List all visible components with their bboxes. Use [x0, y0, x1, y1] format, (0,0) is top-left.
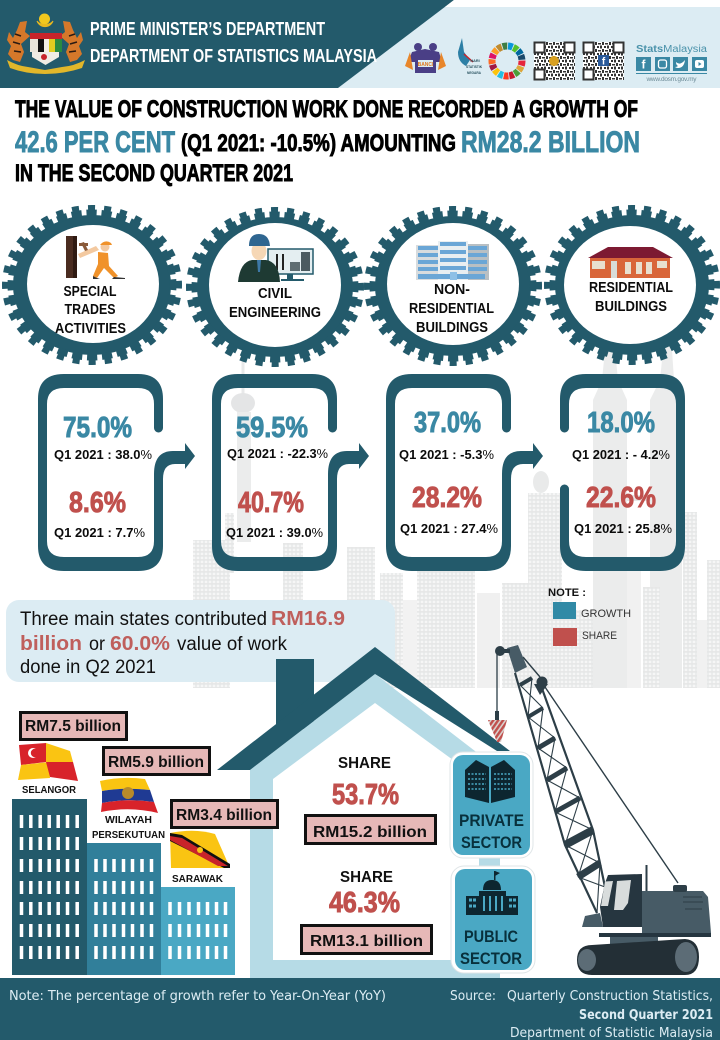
gear: residential buildings: BUILDINGS — [595, 299, 667, 315]
callout: three main states: or — [89, 634, 106, 655]
white ground below skyline — [394, 688, 720, 978]
StatsMalaysia social block — [636, 44, 707, 83]
gear: residential buildings: RESIDENTIAL — [589, 280, 673, 296]
flag: Sarawak — [170, 831, 230, 868]
flag: Selangor — [18, 743, 78, 781]
figures: special trades — [54, 412, 152, 540]
icon: SDG wheel — [492, 46, 522, 76]
legend: SHARE — [582, 630, 617, 642]
footer band — [0, 978, 720, 1040]
header text: PRIME MINISTER’S DEPARTMENT — [90, 19, 325, 39]
figures: special trades: 8.6% — [69, 487, 126, 519]
callout: three main states: Three main states contributed — [20, 609, 267, 630]
figures: non-residential: 37.0% — [414, 407, 481, 439]
figures: civil engineering: 40.7% — [238, 487, 304, 519]
bar: Sarawak — [161, 887, 235, 975]
gear: civil engineering: CIVIL — [258, 286, 292, 302]
figures: civil engineering — [226, 412, 328, 540]
gear: non-residential buildings: NON- — [434, 282, 470, 298]
StatsMalaysia social block: f — [642, 58, 646, 72]
gear: special trades activities — [6, 208, 178, 362]
value tag: RM7.5 billion — [20, 712, 126, 740]
figures: residential: Q1 2021 : 25.8% — [574, 521, 672, 536]
header band — [0, 0, 720, 88]
house — [217, 647, 510, 978]
icon: Hari Statistik Negara logo — [458, 38, 482, 75]
figures: civil engineering: Q1 2021 : -22.3% — [227, 446, 328, 461]
legend: GROWTH — [581, 608, 631, 620]
value tag: RM7.5 billion: RM7.5 billion — [25, 718, 121, 735]
panel: public sector: PUBLIC — [464, 927, 518, 946]
state labels: WILAYAH — [105, 814, 152, 826]
state labels — [22, 784, 223, 885]
icon: QR code 2 — [583, 42, 624, 80]
panel: private sector: SECTOR — [461, 833, 522, 852]
icon: QR code 2: f — [602, 56, 606, 68]
panel: special trades arrow frame — [38, 374, 195, 571]
icon: Banci logo: BANCI — [418, 62, 434, 68]
icon: Malaysia coat of arms — [7, 14, 85, 74]
private sector share: 53.7% — [332, 779, 399, 811]
header text: DEPARTMENT OF STATISTICS MALAYSIA — [90, 46, 377, 66]
value tag: RM3.4 billion — [172, 800, 278, 828]
figures: non-residential — [399, 407, 498, 536]
gear: special trades activities: TRADES — [64, 302, 116, 318]
figures: non-residential: Q1 2021 : -5.3% — [399, 447, 494, 462]
icon: crane — [488, 645, 711, 975]
callout: three main states: RM16.9 — [271, 608, 345, 630]
title: IN THE SECOND QUARTER 2021 — [15, 160, 293, 187]
private sector share — [306, 755, 436, 844]
icon: Banci logo — [405, 43, 446, 73]
bar: Wilayah Persekutuan — [87, 843, 161, 975]
background skyline — [193, 320, 720, 688]
legend — [548, 587, 631, 646]
callout: three main states: value of work — [177, 634, 287, 655]
flag: Wilayah Persekutuan — [100, 778, 158, 813]
private sector share: SHARE — [338, 755, 391, 772]
state labels: SELANGOR — [22, 784, 76, 796]
gear: special trades activities: ACTIVITIES — [55, 321, 126, 337]
value tag: RM5.9 billion: RM5.9 billion — [108, 754, 204, 771]
icon: office blocks — [416, 241, 489, 280]
figures: special trades: Q1 2021 : 7.7% — [54, 525, 145, 540]
public sector share: RM13.1 billion — [310, 933, 423, 950]
icon: house — [588, 247, 673, 278]
icon: Hari Statistik Negara logo: HARI — [470, 59, 480, 63]
figures: residential: 22.6% — [586, 482, 656, 514]
public sector share — [302, 869, 432, 954]
public sector share: 46.3% — [329, 887, 400, 919]
gear: non-residential buildings — [368, 210, 538, 362]
figures: residential: Q1 2021 : - 4.2% — [572, 447, 670, 462]
callout: three main states: 60.0% — [110, 633, 170, 655]
callout: three main states: done in Q2 2021 — [20, 657, 156, 678]
state labels: PERSEKUTUAN — [92, 829, 165, 841]
figures: civil engineering: Q1 2021 : 39.0% — [226, 525, 323, 540]
figures: residential — [572, 407, 672, 536]
icon: Hari Statistik Negara logo: NEGARA — [467, 70, 481, 75]
state labels: SARAWAK — [172, 873, 223, 885]
gear: civil engineering — [190, 210, 360, 364]
gear: residential buildings — [548, 208, 716, 362]
public sector share: SHARE — [340, 869, 393, 886]
title: (Q1 2021: -10.5%) AMOUNTING — [181, 130, 456, 157]
icon: office towers — [465, 760, 515, 803]
icon: worker with hammer — [66, 236, 125, 279]
figures: civil engineering: 59.5% — [236, 412, 308, 444]
footnote: Note: The percentage of growth refer to Year-On-Year (YoY) — [9, 989, 386, 1004]
StatsMalaysia social block: Stats Malaysia — [636, 44, 707, 55]
value tag: RM5.9 billion — [104, 748, 210, 774]
title — [15, 96, 640, 187]
header text — [90, 19, 377, 66]
source: Source: — [450, 989, 496, 1004]
bar: Selangor — [12, 799, 87, 975]
icon: government building — [466, 871, 518, 915]
StatsMalaysia social block: www.dosm.gov.my — [646, 76, 697, 83]
callout: three main states: billion — [20, 633, 82, 655]
panel: non-residential arrow frame — [386, 374, 543, 571]
figures: special trades: Q1 2021 : 38.0% — [54, 447, 152, 462]
panel: residential frame — [560, 374, 685, 571]
state bars — [12, 799, 235, 975]
icon: QR code 1 — [534, 42, 575, 80]
panel: private sector — [450, 752, 533, 858]
gear: special trades activities: SPECIAL — [64, 284, 117, 300]
panel: private sector: PRIVATE — [459, 811, 524, 830]
title: 42.6 PER CENT — [15, 126, 175, 159]
panel: civil engineering arrow frame — [212, 374, 369, 571]
figures: residential: 18.0% — [587, 407, 655, 439]
panel: public sector: SECTOR — [460, 949, 522, 968]
value tag: RM3.4 billion: RM3.4 billion — [176, 807, 272, 824]
title: RM28.2 BILLION — [461, 126, 640, 159]
private sector share: RM15.2 billion — [313, 824, 427, 841]
figures: non-residential: Q1 2021 : 27.4% — [400, 521, 498, 536]
icon: Hari Statistik Negara logo: STATISTIK — [466, 64, 482, 69]
gear: non-residential buildings: RESIDENTIAL — [409, 301, 494, 317]
gear: non-residential buildings: BUILDINGS — [416, 320, 488, 336]
panel: public sector — [451, 866, 535, 973]
footer band: Quarterly Construction Statistics, — [507, 989, 713, 1004]
figures: special trades: 75.0% — [63, 412, 132, 444]
figures: non-residential: 28.2% — [412, 482, 482, 514]
callout: three main states — [6, 600, 395, 682]
legend: NOTE : — [548, 587, 586, 599]
gear: civil engineering: ENGINEERING — [229, 305, 321, 321]
icon: engineer with screen — [238, 234, 313, 282]
